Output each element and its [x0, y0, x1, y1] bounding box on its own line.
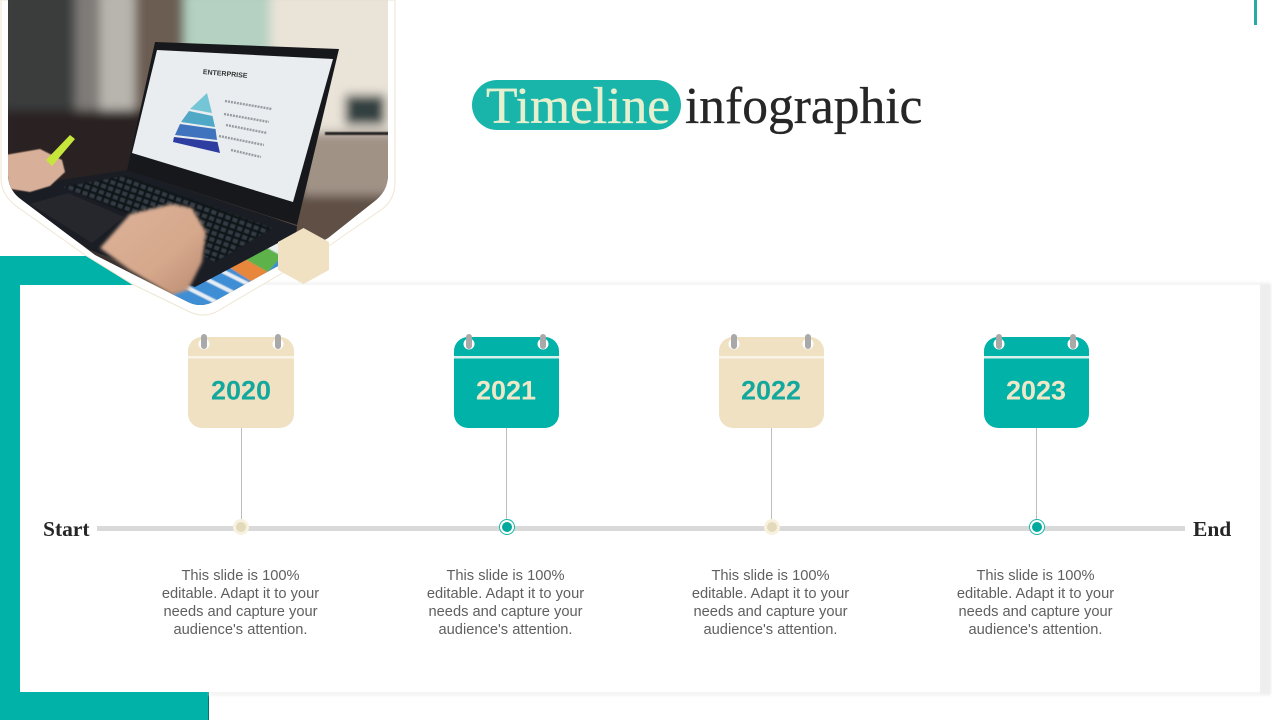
description: audience's attention. — [968, 622, 1102, 638]
node — [764, 519, 780, 535]
stem — [1036, 428, 1037, 520]
timeline axis — [97, 526, 1185, 531]
milestone 2020 — [162, 334, 319, 638]
node — [1030, 520, 1044, 534]
pyramid on screen — [173, 93, 220, 153]
screen labels — [219, 101, 272, 157]
stem — [506, 428, 507, 520]
description: This slide is 100% — [181, 568, 300, 584]
hexagon accent — [278, 228, 329, 284]
description: needs and capture your — [428, 604, 583, 620]
description: audience's attention. — [704, 622, 838, 638]
pen — [46, 135, 75, 166]
description: editable. Adapt it to your — [427, 586, 584, 602]
screen — [132, 50, 333, 202]
milestone 2023 — [957, 334, 1114, 638]
label: End: End — [1193, 517, 1231, 541]
milestone 2022 — [692, 334, 849, 638]
calendar icon: 2020 — [211, 376, 271, 406]
description: needs and capture your — [694, 604, 848, 620]
description: needs and capture your — [164, 604, 318, 620]
touchpad — [30, 193, 124, 243]
photo frame outline — [1, 0, 395, 315]
calendar icon — [984, 334, 1089, 428]
main panel — [20, 282, 1271, 696]
screen bezel — [127, 42, 339, 225]
calendar icon: 2023 — [1006, 376, 1066, 406]
title highlight pill — [472, 80, 681, 130]
teal frame — [0, 256, 209, 720]
description: audience's attention. — [174, 622, 308, 638]
title word: infographic: infographic — [685, 78, 922, 135]
screen heading: ENTERPRISE — [203, 69, 248, 80]
keyboard — [63, 176, 272, 262]
photo: person using laptop — [0, 0, 400, 320]
node — [233, 519, 249, 535]
stem — [771, 428, 772, 520]
milestone 2021 — [427, 334, 584, 638]
left hand — [5, 149, 65, 192]
title word: Timeline: Timeline — [486, 78, 670, 135]
calendar icon — [719, 334, 824, 428]
description: This slide is 100% — [711, 568, 830, 584]
right hand — [100, 204, 206, 295]
node — [500, 520, 514, 534]
laptop deck — [8, 170, 297, 287]
colourful book — [172, 243, 278, 305]
stem — [241, 428, 242, 520]
description: This slide is 100% — [976, 568, 1095, 584]
description: needs and capture your — [958, 604, 1113, 620]
description: editable. Adapt it to your — [957, 586, 1114, 602]
description: editable. Adapt it to your — [162, 586, 319, 602]
description: This slide is 100% — [446, 568, 565, 584]
label: Start: Start — [43, 517, 90, 541]
description: audience's attention. — [438, 622, 572, 638]
description: editable. Adapt it to your — [692, 586, 849, 602]
calendar icon: 2022 — [741, 376, 801, 406]
calendar icon — [188, 334, 294, 428]
calendar icon: 2021 — [476, 376, 536, 406]
top-right tick — [1254, 0, 1257, 25]
counter edge — [325, 132, 390, 135]
title — [472, 78, 922, 135]
calendar icon — [454, 334, 559, 428]
